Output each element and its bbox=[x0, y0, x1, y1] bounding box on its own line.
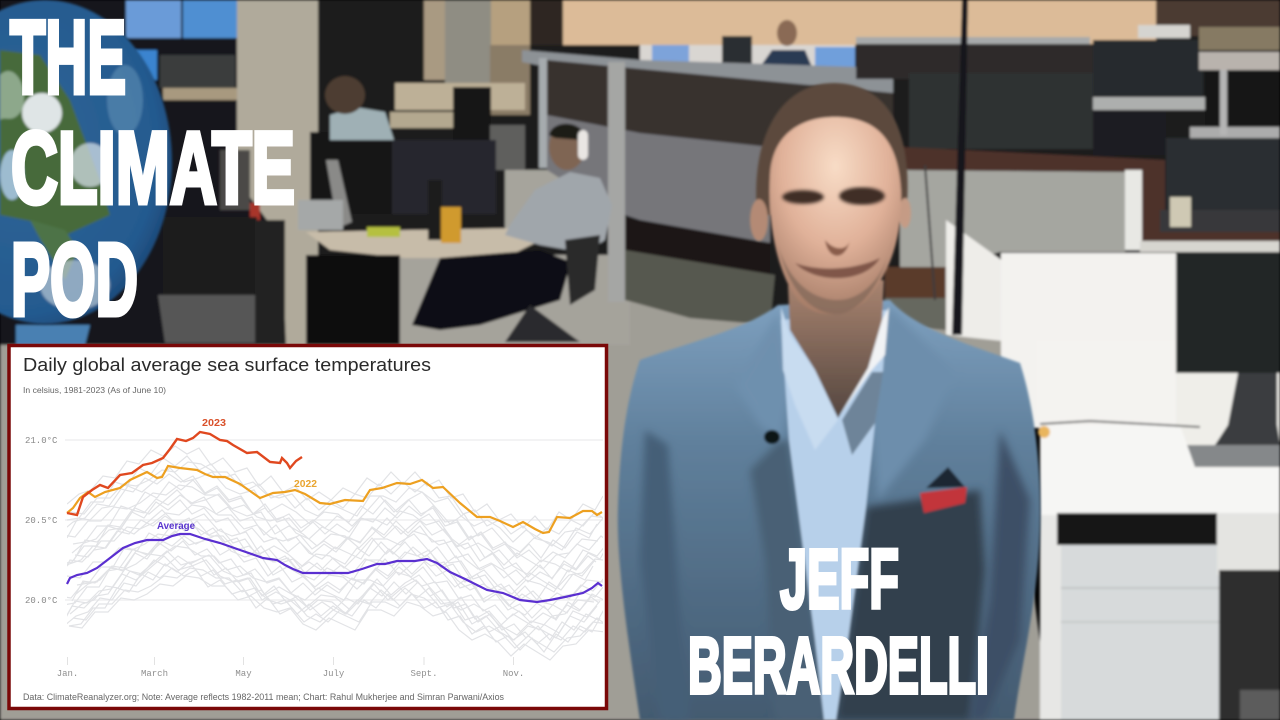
face bbox=[770, 117, 901, 314]
name: Jeff Berardelli: JEFF bbox=[780, 532, 899, 626]
microphone bbox=[764, 430, 780, 444]
tripod pole bbox=[952, 0, 968, 335]
colleague behind desk bbox=[760, 20, 812, 67]
floor bbox=[0, 255, 1050, 720]
x axis: March bbox=[141, 669, 168, 679]
name: Jeff Berardelli bbox=[688, 532, 989, 710]
jacket lapels bbox=[735, 312, 790, 440]
neck bbox=[788, 280, 884, 418]
chart heading: Daily global average sea surface temperatures bbox=[23, 355, 431, 375]
gray partition bbox=[900, 170, 1125, 268]
right workstations bbox=[856, 37, 1090, 44]
back seated person bbox=[325, 76, 394, 140]
x axis: Jan. bbox=[57, 669, 78, 679]
series labels: 2022 bbox=[294, 479, 317, 490]
pocket square bbox=[920, 467, 967, 513]
nose bbox=[825, 240, 850, 256]
line chart bbox=[25, 418, 613, 679]
series labels: Average bbox=[157, 521, 195, 532]
brown desk edge bbox=[900, 147, 1280, 241]
series labels: 2023 bbox=[202, 418, 226, 429]
pillar bbox=[237, 0, 318, 345]
far desks bbox=[395, 83, 525, 110]
dark left zone bbox=[0, 0, 320, 345]
thin cable bbox=[925, 165, 935, 300]
title: The Climate Pod bbox=[10, 0, 295, 337]
speckled carpet bbox=[625, 250, 775, 325]
series labels bbox=[157, 418, 317, 532]
jaw stubble bbox=[778, 240, 892, 314]
x axis: Sept. bbox=[410, 669, 438, 679]
y axis labels: 20.0°C bbox=[25, 596, 58, 606]
y axis labels bbox=[25, 436, 58, 606]
mouth bbox=[795, 258, 880, 278]
blue screens bbox=[126, 0, 237, 80]
round desk bbox=[306, 228, 535, 258]
shirt bbox=[781, 310, 887, 720]
historical gray lines bbox=[57, 446, 613, 660]
name: Jeff Berardelli: BERARDELLI bbox=[688, 621, 989, 710]
title: The Climate Pod: THE bbox=[10, 0, 126, 116]
office chair bbox=[158, 217, 285, 345]
under-desk dark bbox=[306, 255, 400, 345]
dark jacket front bbox=[836, 490, 985, 720]
x axis bbox=[57, 657, 524, 679]
person: Jeff Berardelli bbox=[618, 83, 1040, 720]
ears bbox=[750, 198, 911, 241]
x axis: Nov. bbox=[503, 669, 524, 679]
reception desk bbox=[522, 50, 893, 95]
seated man with headphones bbox=[412, 124, 612, 342]
title: The Climate Pod: CLIMATE bbox=[11, 111, 295, 225]
lower left shirt fragment bbox=[16, 325, 90, 345]
right monitor bbox=[1176, 253, 1280, 373]
under desk and cabinet bbox=[1040, 515, 1062, 720]
2023 line bbox=[67, 432, 302, 515]
hair bbox=[756, 83, 908, 215]
y axis labels: 20.5°C bbox=[25, 516, 58, 526]
panel frame bbox=[9, 346, 606, 708]
x axis: May bbox=[235, 669, 252, 679]
icon: earth globe bbox=[0, 0, 180, 325]
monitors bbox=[310, 132, 392, 214]
chart source note: Data: ClimateReanalyzer.org; Note: Average reflects 1982-2011 mean; Chart: Rahul Mukherjee and Simran Parwani/Axios bbox=[23, 692, 504, 703]
x axis: July bbox=[323, 669, 345, 679]
dark left desk clutter bbox=[298, 200, 343, 230]
average line bbox=[67, 534, 602, 602]
jacket bbox=[618, 300, 1040, 720]
title: The Climate Pod: POD bbox=[11, 222, 138, 337]
2022 line bbox=[67, 466, 602, 533]
white desk bbox=[1040, 425, 1280, 515]
far desk back row bbox=[640, 45, 855, 67]
y axis labels: 21.0°C bbox=[25, 436, 58, 446]
chart subtitle: In celsius, 1981-2023 (As of June 10) bbox=[23, 385, 166, 395]
panel: sea surface temperature chart bbox=[9, 346, 613, 708]
upper back area bbox=[318, 0, 1280, 345]
white partitions bbox=[946, 220, 1040, 345]
eyes and brows bbox=[782, 187, 885, 205]
